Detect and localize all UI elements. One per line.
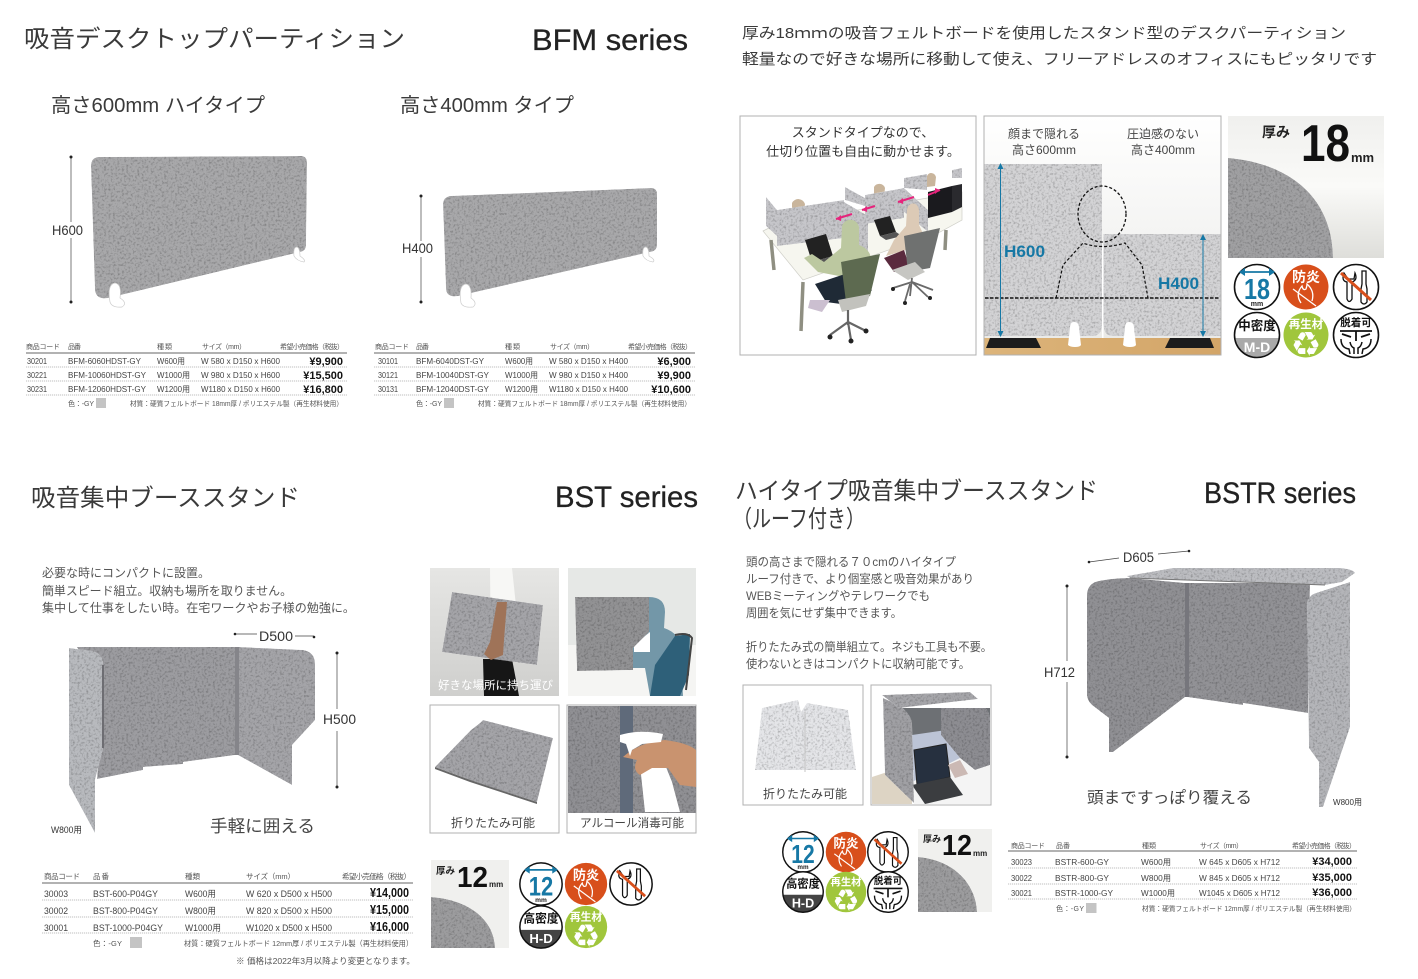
table: BFM 400mm: 種類 xyxy=(505,342,520,351)
dimension: D500: D500 xyxy=(259,628,293,644)
table: BFM 400mm: BFM-12040DST-GY xyxy=(416,385,490,394)
text block: BST description xyxy=(42,566,355,615)
table: BFM 600mm: ¥9,900 xyxy=(309,356,343,368)
table: BSTR: BSTR-800-GY xyxy=(1055,874,1110,883)
photo: thickness 12mm BSTR: mm xyxy=(973,849,987,858)
photo: partition in use xyxy=(568,568,696,696)
icon: thickness 18: mm xyxy=(1251,301,1263,308)
icon: detachable xyxy=(1334,312,1378,358)
table: BFM 400mm: W1180 x D150 x H400 xyxy=(549,385,629,394)
text block: BSTR description: 折りたたみ式の簡単組立て。ネジも工具も不要。 xyxy=(746,639,992,654)
icon: thickness 18 xyxy=(1234,264,1280,310)
photo: thickness 18mm: 18 xyxy=(1301,115,1350,173)
table: BST: W 820 x D500 x H500 xyxy=(246,906,332,916)
photo: thickness 12mm BSTR: 厚み xyxy=(923,834,941,844)
table: BST: BST-1000-P04GY xyxy=(93,923,163,933)
icon: detachable BSTR xyxy=(868,872,908,912)
text block: BSTR description: 周囲を気にせず集中できます。 xyxy=(746,605,902,620)
table: BFM 400mm: BFM-10040DST-GY xyxy=(416,371,490,380)
table: BSTR xyxy=(1008,841,1357,913)
table: BST: 30001 xyxy=(44,923,68,933)
photo: thickness 12mm BST: 12 xyxy=(457,862,488,894)
photo: thickness 18mm: mm xyxy=(1351,150,1374,165)
text block: BST description: 必要な時にコンパクトに設置。 xyxy=(42,566,210,580)
photo: alcohol disinfection: アルコール消毒可能 xyxy=(580,816,684,830)
table: BFM 600mm: W600用 xyxy=(157,357,185,366)
illustration: height comparison: H600 xyxy=(1004,242,1045,261)
icon: recycled BSTR: 再生材 xyxy=(830,876,862,889)
photo: folding xyxy=(430,705,559,833)
table: BFM 400mm: ¥10,600 xyxy=(651,384,691,396)
table: BST: W800用 xyxy=(185,906,216,916)
icon: medium density: 中密度 xyxy=(1238,318,1276,333)
table: BFM 400mm: 希望小売価格（税抜） xyxy=(628,342,692,351)
table: BFM 600mm: 色：-GY xyxy=(68,399,94,408)
table: BSTR: 種類 xyxy=(1142,841,1156,850)
icon: no tools BST xyxy=(610,863,652,905)
photo: alcohol disinfection xyxy=(567,705,696,833)
dimension: D605 xyxy=(1088,549,1190,565)
table: BFM 600mm: 材質：硬質フェルトボード 18mm厚 / ポリエステル製（再生材料使用） xyxy=(130,399,343,408)
table: BSTR: W600用 xyxy=(1141,858,1171,867)
table: BST: W1020 x D500 x H500 xyxy=(246,923,332,933)
icon: thickness 12 BST: 12 xyxy=(529,870,553,901)
dimension: H400: H400 xyxy=(402,240,433,256)
panel: BST series xyxy=(31,481,698,966)
product: 400mm felt panel xyxy=(443,188,657,307)
icon: high density BST xyxy=(520,906,562,948)
table: BST: サイズ（mm） xyxy=(246,871,295,881)
icon: flame retardant: 防炎 xyxy=(1292,269,1320,285)
dimension: H400 xyxy=(402,194,433,304)
icon: flame retardant BST: 防炎 xyxy=(573,866,599,882)
icon: recycled BST: 再生材 xyxy=(570,909,602,923)
series name: BST: BST series xyxy=(555,481,698,514)
product: BST stand: W800用 xyxy=(51,825,82,835)
table: BST: 30002 xyxy=(44,906,68,916)
title: BSTR xyxy=(733,478,1098,533)
text block: BSTR description: ルーフ付きで、より個室感と吸音効果があり xyxy=(746,571,974,586)
photo: thickness 12mm BSTR xyxy=(918,829,992,912)
table: BST: 希望小売価格（税抜） xyxy=(342,871,411,881)
illustration: height comparison: 高さ600mm xyxy=(1012,143,1076,157)
icon: detachable: 脱着可 xyxy=(1340,316,1372,329)
table: BFM 400mm: 30121 xyxy=(378,371,398,380)
icon: thickness 12 BSTR xyxy=(783,832,823,872)
icon: high density BST: 高密度 xyxy=(523,911,559,925)
illustration: height comparison: H400 xyxy=(1158,274,1199,293)
product: BSTR stand xyxy=(1044,549,1362,807)
text block: BSTR description xyxy=(746,555,992,671)
table: BST: 種類 xyxy=(185,871,200,881)
icon: flame retardant BSTR: 防炎 xyxy=(833,836,859,851)
icon: thickness 12 BSTR: mm xyxy=(797,864,809,871)
front person and chair xyxy=(804,220,871,280)
illustration: height comparison: 高さ400mm xyxy=(1131,143,1195,157)
heading: 600mm: 高さ600mm ハイタイプ xyxy=(51,94,265,117)
back row of heads xyxy=(792,173,936,213)
product: BST stand xyxy=(51,628,356,836)
table: BSTR: 材質：硬質フェルトボード 12mm厚 / ポリエステル製（再生材料使用） xyxy=(1142,904,1356,913)
table: BFM 400mm: W 980 x D150 x H400 xyxy=(549,371,629,380)
table: BSTR: 30022 xyxy=(1011,874,1033,883)
table: BFM 600mm: 30201 xyxy=(27,357,47,366)
table: BFM 600mm: BFM-10060HDST-GY xyxy=(68,371,147,380)
icon: flame retardant xyxy=(1284,264,1328,310)
text block: BST description: 集中して仕事をしたい時。在宅ワークやお子様の勉強に。 xyxy=(42,600,355,615)
dimension: H712 xyxy=(1044,584,1075,758)
table: BFM 600mm: ¥16,800 xyxy=(303,384,343,396)
photo: thickness 18mm: 厚み xyxy=(1262,124,1290,140)
icon: thickness 18: 18 xyxy=(1244,274,1270,306)
icon: recycled BSTR: ♻ xyxy=(832,884,860,919)
title: BSTR: （ルーフ付き） xyxy=(733,506,865,533)
dimension: D500 xyxy=(234,628,315,644)
text block: BSTR description: 頭の高さまで隠れる７０cmのハイタイプ xyxy=(746,555,956,569)
dimension: H712: H712 xyxy=(1044,664,1075,680)
table: BFM 400mm: 30101 xyxy=(378,357,398,366)
icon: high density BSTR: 高密度 xyxy=(786,877,820,890)
table: BFM 400mm: 材質：硬質フェルトボード 18mm厚 / ポリエステル製（再生材料使用） xyxy=(478,399,691,408)
table: BST: 色：-GY xyxy=(93,938,122,948)
dimension: H500: H500 xyxy=(323,711,356,727)
table: BFM 600mm: BFM-12060HDST-GY xyxy=(68,385,147,394)
panel: BFM features xyxy=(740,24,1384,365)
table: BFM 400mm: 品番 xyxy=(416,343,429,351)
table: BFM 600mm: 30231 xyxy=(27,385,47,394)
text block: intro: 軽量なので好きな場所に移動して使え、フリーアドレスのオフィスにもピッタリです xyxy=(742,51,1377,68)
product: BSTR stand: 頭まですっぽり覆える xyxy=(1087,789,1252,807)
icon: flame retardant BSTR xyxy=(826,832,866,872)
table: BSTR: ¥36,000 xyxy=(1312,887,1352,899)
product: BSTR stand: W800用 xyxy=(1333,797,1362,807)
back person and chair xyxy=(886,203,926,256)
photo: thickness 18mm xyxy=(1228,115,1384,258)
table: BFM 400mm: W 580 x D150 x H400 xyxy=(549,357,629,366)
table: BFM 600mm xyxy=(26,342,347,408)
table: BFM 600mm: BFM-6060HDST-GY xyxy=(68,357,142,366)
table: BFM 600mm: ¥15,500 xyxy=(303,370,343,382)
table: BFM 600mm: W1000用 xyxy=(157,371,190,380)
table: BST: 材質：硬質フェルトボード 12mm厚 / ポリエステル製（再生材料使用） xyxy=(184,938,413,948)
table: BSTR: サイズ（mm） xyxy=(1200,841,1243,850)
table: BST: 30003 xyxy=(44,889,68,899)
table: BST: ¥16,000 xyxy=(370,920,409,934)
photo: thickness 12mm BST: mm xyxy=(489,880,503,889)
table: BFM 400mm xyxy=(374,342,695,408)
icon: recycled material xyxy=(1284,312,1328,365)
dimension: H500 xyxy=(323,652,356,788)
series name: BFM: BFM series xyxy=(532,24,688,57)
icon: recycled BST: ♻ xyxy=(572,917,600,955)
photo: carrying xyxy=(430,568,559,696)
table: BFM 600mm: W 580 x D150 x H600 xyxy=(201,357,281,366)
photo: thickness 12mm BST: 厚み xyxy=(436,866,456,877)
text block: intro xyxy=(742,24,1377,68)
table: BFM 600mm: W 980 x D150 x H600 xyxy=(201,371,281,380)
text block: BSTR description: 使わないときはコンパクトに収納可能です。 xyxy=(746,656,970,671)
icon: recycled BST xyxy=(565,906,607,955)
dimension: H600 xyxy=(52,156,83,304)
icon: flame retardant BST xyxy=(565,863,607,905)
table: BFM 600mm: 種類 xyxy=(157,342,172,351)
table: BST: ※ 価格は2022年3月以降より変更となります。 xyxy=(236,956,415,966)
table: BFM 400mm: 色：-GY xyxy=(416,399,442,408)
table: BFM 600mm: 品番 xyxy=(68,343,81,351)
table: BFM 400mm: ¥9,900 xyxy=(657,370,691,382)
illustration: stand type office xyxy=(740,116,976,355)
photo: BSTR in use xyxy=(871,685,991,805)
table: BSTR: 色：-GY xyxy=(1056,904,1084,913)
table: BSTR: W1045 x D605 x H712 xyxy=(1199,889,1281,898)
illustration: height comparison: 顔まで隠れる xyxy=(1008,127,1080,141)
table: BST: BST-800-P04GY xyxy=(93,906,158,916)
text block: BSTR description: WEBミーティングやテレワークでも xyxy=(746,589,930,603)
table: BFM 400mm: 30131 xyxy=(378,385,398,394)
icon: detachable BSTR: 脱着可 xyxy=(874,875,902,887)
table: BFM 600mm: W1200用 xyxy=(157,385,190,394)
table: BSTR: W800用 xyxy=(1141,874,1171,883)
table: BFM 600mm: 商品コード xyxy=(26,342,60,351)
illustration: height comparison xyxy=(984,116,1221,355)
table: BFM 400mm: W600用 xyxy=(505,357,533,366)
icon: medium density xyxy=(1234,312,1280,358)
text block: BST description: 簡単スピード組立。収納も場所を取りません。 xyxy=(42,583,292,598)
table: BST: W600用 xyxy=(185,889,216,899)
table: BFM 400mm: BFM-6040DST-GY xyxy=(416,357,485,366)
title: desktop partition: 吸音デスクトップパーティション xyxy=(24,26,405,53)
table: BST: 商品コード xyxy=(44,871,80,881)
title: BST: 吸音集中ブーススタンド xyxy=(31,485,300,512)
photo: folded BSTR xyxy=(743,685,863,805)
panel: BSTR series xyxy=(733,477,1362,919)
table: BFM 400mm: 商品コード xyxy=(375,342,409,351)
panel: BFM series xyxy=(24,24,695,408)
table: BSTR: W 645 x D605 x H712 xyxy=(1199,858,1281,867)
illustration: stand type office: 仕切り位置も自由に動かせます。 xyxy=(766,144,960,159)
table: BFM 400mm: ¥6,900 xyxy=(657,356,691,368)
icon: high density BST: H-D xyxy=(529,931,553,946)
series name: BSTR: BSTR series xyxy=(1204,477,1356,510)
table: BST: W1000用 xyxy=(185,923,221,933)
table: BST: ¥15,000 xyxy=(370,903,409,917)
table: BST: 品番 xyxy=(93,871,110,881)
table: BFM 400mm: W1200用 xyxy=(505,385,538,394)
dimension: D605: D605 xyxy=(1123,549,1154,565)
table: BSTR: 希望小売価格（税抜） xyxy=(1292,841,1356,850)
product: BST stand: 手軽に囲える xyxy=(210,817,315,836)
table: BFM 400mm: サイズ（mm） xyxy=(550,342,594,351)
table: BFM 600mm: 30221 xyxy=(27,371,47,380)
table: BFM 400mm: W1000用 xyxy=(505,371,538,380)
table: BSTR: 30023 xyxy=(1011,858,1033,867)
icon: thickness 12 BST: mm xyxy=(535,897,547,904)
table: BSTR: W1000用 xyxy=(1141,889,1175,898)
table: BFM 600mm: W1180 x D150 x H600 xyxy=(201,385,281,394)
icon: recycled material: 再生材 xyxy=(1289,317,1324,331)
photo: thickness 12mm BSTR: 12 xyxy=(942,830,972,862)
icon: no tools xyxy=(1334,264,1378,310)
table: BSTR: 商品コード xyxy=(1011,841,1045,850)
icon: high density BSTR xyxy=(783,872,823,912)
table: BSTR: BSTR-1000-GY xyxy=(1055,889,1114,898)
heading: 400mm: 高さ400mm タイプ xyxy=(400,94,574,117)
table: BSTR: 品番 xyxy=(1056,842,1070,850)
title: BSTR: ハイタイプ吸音集中ブーススタンド xyxy=(735,478,1098,505)
icon: high density BSTR: H-D xyxy=(792,896,814,910)
photo: folding: 折りたたみ可能 xyxy=(451,815,535,830)
table: BFM 600mm: サイズ（mm） xyxy=(202,342,246,351)
table: BFM 600mm: 希望小売価格（税抜） xyxy=(280,342,344,351)
icon: thickness 12 BSTR: 12 xyxy=(791,839,815,869)
icon: recycled BSTR xyxy=(826,872,866,919)
table: BSTR: W 845 x D605 x H712 xyxy=(1199,874,1281,883)
table: BST: ¥14,000 xyxy=(370,886,409,900)
table: BSTR: ¥35,000 xyxy=(1312,872,1352,884)
table: BSTR: 30021 xyxy=(1011,889,1033,898)
table: BST: W 620 x D500 x H500 xyxy=(246,889,332,899)
table: BST: BST-600-P04GY xyxy=(93,889,158,899)
icon: thickness 12 BST xyxy=(520,863,562,905)
photo: carrying: 好きな場所に持ち運び xyxy=(438,678,553,692)
photo: folded BSTR: 折りたたみ可能 xyxy=(763,786,847,801)
icon: recycled material: ♻ xyxy=(1291,325,1321,365)
text block: intro: 厚み18ｍｍの吸音フェルトボードを使用したスタンド型のデスクパーティション xyxy=(742,24,1346,42)
table: BSTR: ¥34,000 xyxy=(1312,856,1352,868)
illustration: height comparison: 圧迫感のない xyxy=(1127,126,1199,141)
icon: medium density: M-D xyxy=(1244,339,1270,355)
illustration: stand type office: スタンドタイプなので、 xyxy=(792,125,934,140)
table: BSTR: BSTR-600-GY xyxy=(1055,858,1110,867)
table: BST xyxy=(42,871,415,966)
product: 600mm felt panel xyxy=(91,156,307,307)
dimension: H600: H600 xyxy=(52,222,83,238)
icon: no tools BSTR xyxy=(868,832,908,872)
photo: thickness 12mm BST xyxy=(431,860,509,948)
